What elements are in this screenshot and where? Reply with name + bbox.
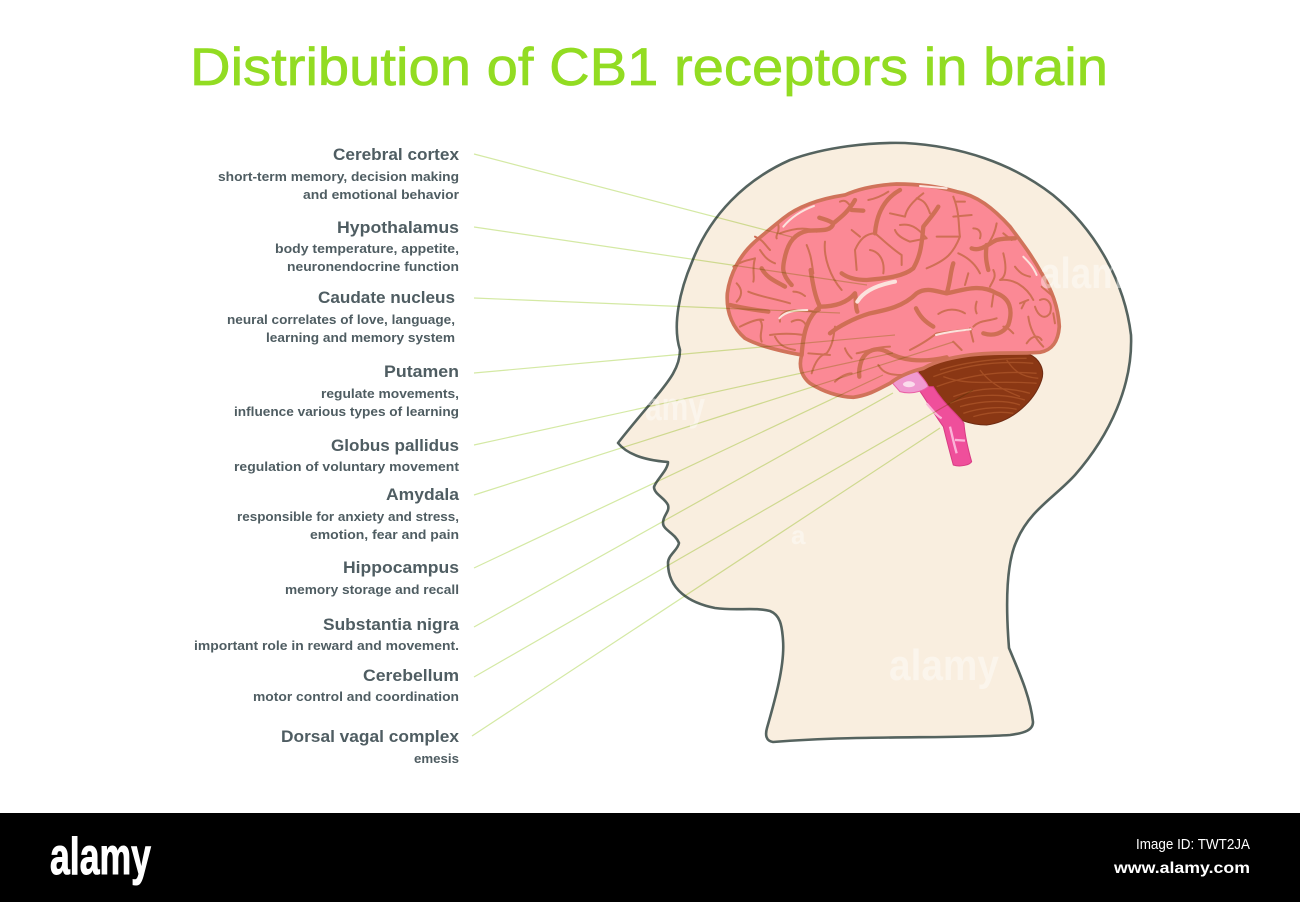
label: caudate nucleus: Caudate nucleus bbox=[318, 288, 455, 307]
label: cerebellum: motor control and coordination bbox=[253, 689, 459, 704]
label: dorsal vagal complex: Dorsal vagal complex bbox=[281, 727, 460, 746]
label: cerebellum bbox=[253, 666, 459, 704]
label: caudate nucleus bbox=[227, 288, 455, 345]
label: hypothalamus: Hypothalamus bbox=[337, 218, 459, 237]
label: dorsal vagal complex bbox=[281, 727, 460, 766]
watermarks: alamy bbox=[889, 641, 999, 690]
footer logo: alamy bbox=[50, 828, 151, 886]
label: substantia nigra: important role in reward and movement. bbox=[194, 638, 459, 653]
label: amydala bbox=[237, 485, 460, 542]
label: cerebral cortex: short-term memory, decision making bbox=[218, 169, 459, 184]
label: hippocampus bbox=[285, 558, 459, 597]
title: Distribution of CB1 receptors in brain bbox=[190, 38, 1108, 97]
watermarks: alam bbox=[1040, 249, 1124, 298]
watermarks bbox=[645, 249, 1124, 690]
label: globus pallidus bbox=[234, 436, 460, 474]
label: cerebral cortex bbox=[218, 145, 460, 202]
label: amydala: emotion, fear and pain bbox=[310, 527, 459, 542]
head silhouette bbox=[618, 143, 1131, 742]
label: substantia nigra bbox=[194, 615, 460, 653]
label: hypothalamus: neuronendocrine function bbox=[287, 259, 459, 274]
watermarks: a bbox=[791, 520, 806, 550]
label: hippocampus: memory storage and recall bbox=[285, 582, 459, 597]
image id: Image ID: TWT2JA bbox=[1136, 836, 1250, 853]
footer bar bbox=[0, 813, 1300, 902]
sulci thick bbox=[730, 190, 1015, 377]
label: caudate nucleus: learning and memory system bbox=[266, 330, 455, 345]
label: dorsal vagal complex: emesis bbox=[414, 751, 459, 766]
label: putamen: regulate movements, bbox=[321, 386, 459, 401]
label: hippocampus: Hippocampus bbox=[343, 558, 459, 577]
sulci thin bbox=[733, 192, 1055, 382]
cerebellum bbox=[917, 353, 1043, 425]
label: cerebral cortex: and emotional behavior bbox=[303, 187, 459, 202]
label: amydala: responsible for anxiety and stress, bbox=[237, 509, 459, 524]
label: amydala: Amydala bbox=[386, 485, 460, 504]
leader lines bbox=[472, 154, 973, 736]
label: cerebral cortex: Cerebral cortex bbox=[333, 145, 460, 164]
watermarks: amy bbox=[645, 385, 706, 429]
label: hypothalamus bbox=[275, 218, 459, 274]
cerebrum bbox=[727, 184, 1059, 397]
brain stem bbox=[893, 372, 972, 466]
label: caudate nucleus: neural correlates of love, language, bbox=[227, 312, 455, 327]
label: substantia nigra: Substantia nigra bbox=[323, 615, 460, 634]
label: putamen: influence various types of learning bbox=[234, 404, 459, 419]
label: putamen bbox=[234, 362, 459, 419]
label: globus pallidus: Globus pallidus bbox=[331, 436, 459, 455]
highlights bbox=[779, 186, 1037, 335]
label: cerebellum: Cerebellum bbox=[363, 666, 459, 685]
label: hypothalamus: body temperature, appetite, bbox=[275, 241, 459, 256]
website: www.alamy.com bbox=[1113, 860, 1250, 877]
brain illustration bbox=[727, 184, 1059, 466]
labels bbox=[194, 145, 460, 766]
label: putamen: Putamen bbox=[384, 362, 459, 381]
label: globus pallidus: regulation of voluntary movement bbox=[234, 459, 460, 474]
